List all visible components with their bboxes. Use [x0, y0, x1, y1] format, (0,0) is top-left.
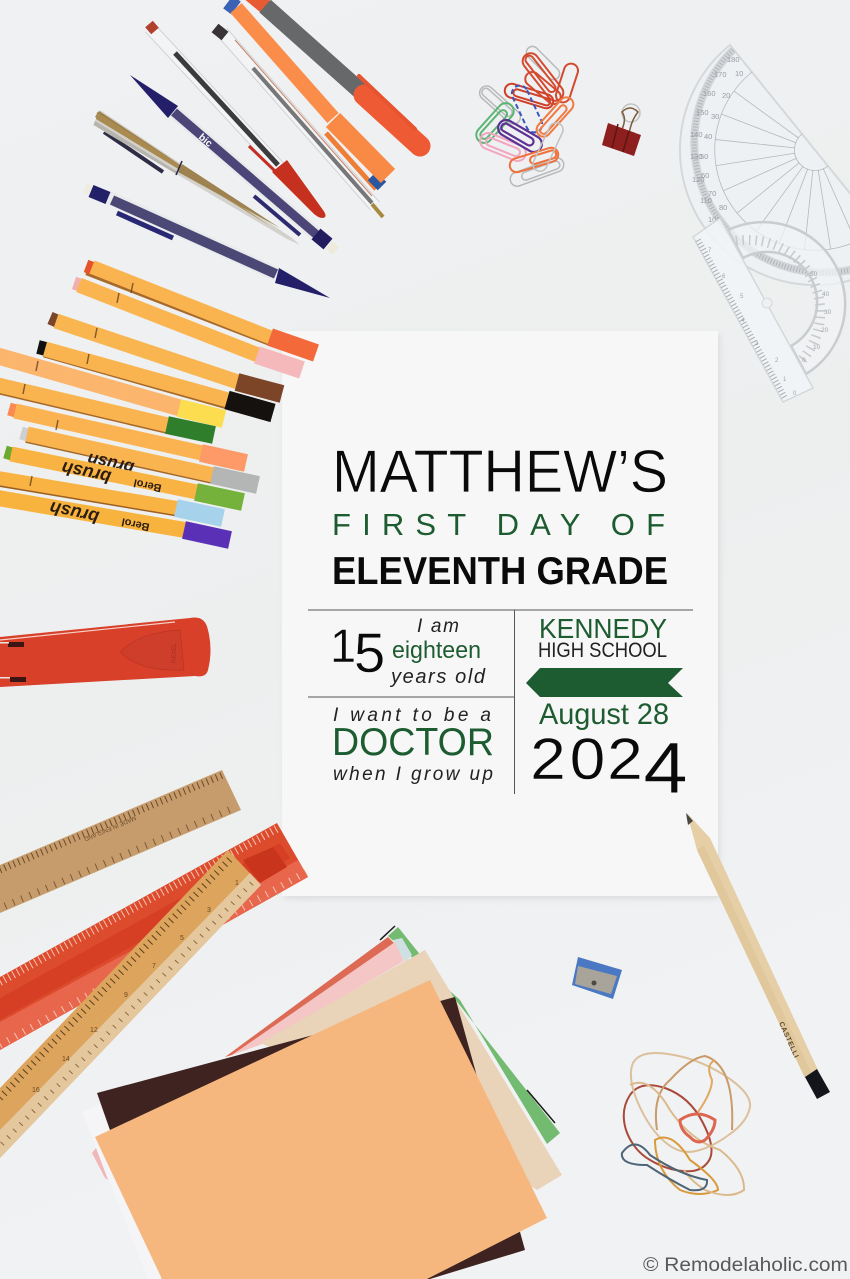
- text block: school: [538, 613, 667, 662]
- icon: clear pen with red cap: [149, 24, 326, 218]
- icon: wooden ruler: MADE IN ENGLAND: [82, 814, 137, 842]
- icon: marker with green cap: [5, 452, 243, 502]
- icon: navy mechanical pencil: [130, 75, 336, 251]
- icon: wooden pencil: CASTELLI: [777, 1021, 799, 1059]
- icon: ruler protractor: 4: [741, 318, 745, 324]
- icon: ruler protractor: 0: [793, 391, 797, 397]
- stack of coloured paper: [82, 926, 562, 1279]
- icon: large protractor: [680, 45, 850, 285]
- icon: large protractor: 50: [700, 152, 708, 161]
- green sheet: [388, 927, 560, 1144]
- icon: ruler protractor: 0: [802, 357, 806, 364]
- icon: marker with purple cap: [0, 498, 230, 540]
- icon: large protractor: 70: [708, 189, 716, 198]
- age number: 1: [330, 619, 356, 672]
- icon: ruler protractor: 20: [821, 327, 829, 334]
- icon: ruler protractor: 30: [824, 309, 832, 316]
- career name: DOCTOR: [332, 721, 494, 764]
- career intro: I want to be a: [333, 705, 491, 726]
- icon: ruler protractor: 7: [708, 248, 712, 254]
- icon: yellow wooden ruler: 7: [152, 963, 156, 970]
- icon: rubber bands: [622, 1053, 750, 1195]
- icon: yellow wooden ruler: 14: [62, 1056, 70, 1063]
- text: year: 2: [530, 727, 566, 791]
- icon: silver pen: [93, 110, 300, 245]
- icon: ruler protractor: [693, 218, 845, 402]
- dividers: info grid lines: [308, 610, 693, 794]
- icon: large protractor: 20: [722, 91, 730, 100]
- icon: large protractor: 140: [690, 130, 703, 139]
- icon: large protractor: 120: [692, 175, 705, 184]
- small pink corner: [92, 1148, 108, 1180]
- icon: large protractor: 10: [735, 69, 743, 78]
- small brand marks on markers: [23, 283, 133, 486]
- black sheet edge: [380, 926, 555, 1123]
- icon: marker with pink cap: [74, 283, 302, 370]
- icon: large protractor: 160: [703, 89, 716, 98]
- pale blue sheet: [393, 938, 412, 962]
- icon: yellow wooden ruler: 3: [207, 907, 211, 914]
- icon: binder clip: [602, 104, 641, 156]
- icon: large protractor: 150: [696, 108, 709, 117]
- icon: marker with brown cap: [50, 318, 282, 394]
- icon: red stapler: REXEL: [172, 643, 178, 663]
- icon: ruler protractor: 50: [810, 271, 818, 278]
- icon: navy pencil: [85, 188, 330, 298]
- text block: career: [332, 705, 494, 785]
- icon: marker with dark green cap: [0, 385, 214, 435]
- icon: green ribbon banner: [526, 668, 683, 697]
- salmon sheet: [225, 937, 396, 1057]
- icon: yellow wooden ruler: [0, 850, 261, 1158]
- icon: ruler protractor: 2: [775, 358, 779, 364]
- icon: large protractor: 170: [714, 70, 727, 79]
- icon: ruler protractor: 1: [783, 377, 787, 383]
- icon: marker with grey cap: [21, 433, 258, 485]
- title: name: MATTHEW’S: [332, 438, 668, 505]
- icon: marker with green cap: brush: [60, 458, 113, 488]
- text: date: August 28: [539, 698, 669, 731]
- icon: large protractor: 100: [708, 215, 721, 224]
- age line: I am: I am: [417, 616, 459, 637]
- icon: yellow wooden ruler: 1: [235, 880, 239, 887]
- icon: large protractor: 130: [690, 152, 703, 161]
- icon: clear pen with dark cap: [215, 28, 383, 217]
- icon: large protractor: 80: [719, 203, 727, 212]
- icon: ruler protractor: 10: [813, 344, 821, 351]
- icon: wooden pencil: [686, 813, 830, 1099]
- career outro: when I grow up: [333, 764, 493, 785]
- icon: large protractor: 30: [711, 112, 719, 121]
- pink sheet: [232, 942, 404, 1055]
- dark brown sheet: [97, 997, 525, 1279]
- peach sheet: [95, 980, 547, 1279]
- icon: marker with green cap: Berol: [133, 476, 163, 494]
- icon: ruler protractor: 40: [822, 291, 830, 298]
- text: year: 0: [570, 727, 605, 791]
- school name: KENNEDY: [539, 613, 667, 644]
- age number: 5: [354, 621, 385, 684]
- icon: yellow wooden ruler: 12: [90, 1027, 98, 1034]
- icon: large protractor: 110: [700, 196, 712, 205]
- icon: marker with black cap: [38, 347, 273, 413]
- icon: paper clips: [473, 44, 580, 188]
- icon: orange pen: [228, 2, 388, 189]
- icon: ruler protractor: 5: [740, 294, 744, 300]
- icon: marker with light blue cap: [0, 478, 223, 518]
- icon: ruler protractor: 3: [755, 341, 759, 347]
- icon: yellow wooden ruler: 5: [180, 935, 184, 942]
- credit: copyright: © Remodelaholic.com: [643, 1255, 848, 1276]
- age line: years old: years old: [389, 666, 486, 688]
- panel: white card: [282, 331, 718, 896]
- icon: grey and orange pen: [250, 0, 420, 146]
- text: year: 2: [607, 727, 643, 791]
- icon: marker with orange cap: [86, 266, 316, 353]
- white sheet: [82, 1100, 180, 1279]
- text: year: 4: [644, 728, 688, 809]
- panel: paper card shadow: [284, 334, 720, 899]
- group: felt-tip markers: [0, 266, 316, 540]
- school type: HIGH SCHOOL: [538, 639, 667, 662]
- icon: large protractor: 40: [704, 132, 712, 141]
- icon: pencil sharpener: [572, 957, 622, 999]
- heading: grade: ELEVENTH GRADE: [332, 550, 668, 593]
- icon: ruler protractor: 6: [722, 274, 726, 280]
- icon: large protractor: 60: [701, 171, 709, 180]
- icon: marker with purple cap: brush: [48, 498, 101, 528]
- icon: marker with yellow cap: [0, 356, 224, 419]
- age in words: eighteen: [392, 637, 481, 664]
- icon: yellow wooden ruler: 9: [124, 992, 128, 999]
- icon: marker with grey cap: brush: [86, 449, 136, 478]
- icon: yellow wooden ruler: 16: [32, 1087, 40, 1094]
- icon: wooden ruler: [0, 770, 241, 913]
- icon: navy mechanical pencil: bic: [196, 132, 215, 150]
- icon: red ruler: [0, 823, 308, 1050]
- subtitle: first day of: FIRST DAY OF: [332, 507, 665, 542]
- icon: marker with purple cap: Berol: [121, 515, 151, 533]
- icon: red stapler: [0, 618, 210, 687]
- icon: large protractor: 180: [727, 55, 740, 64]
- icon: marker with salmon cap: [9, 409, 246, 463]
- text block: age: [330, 616, 486, 688]
- tan sheet: [260, 950, 562, 1190]
